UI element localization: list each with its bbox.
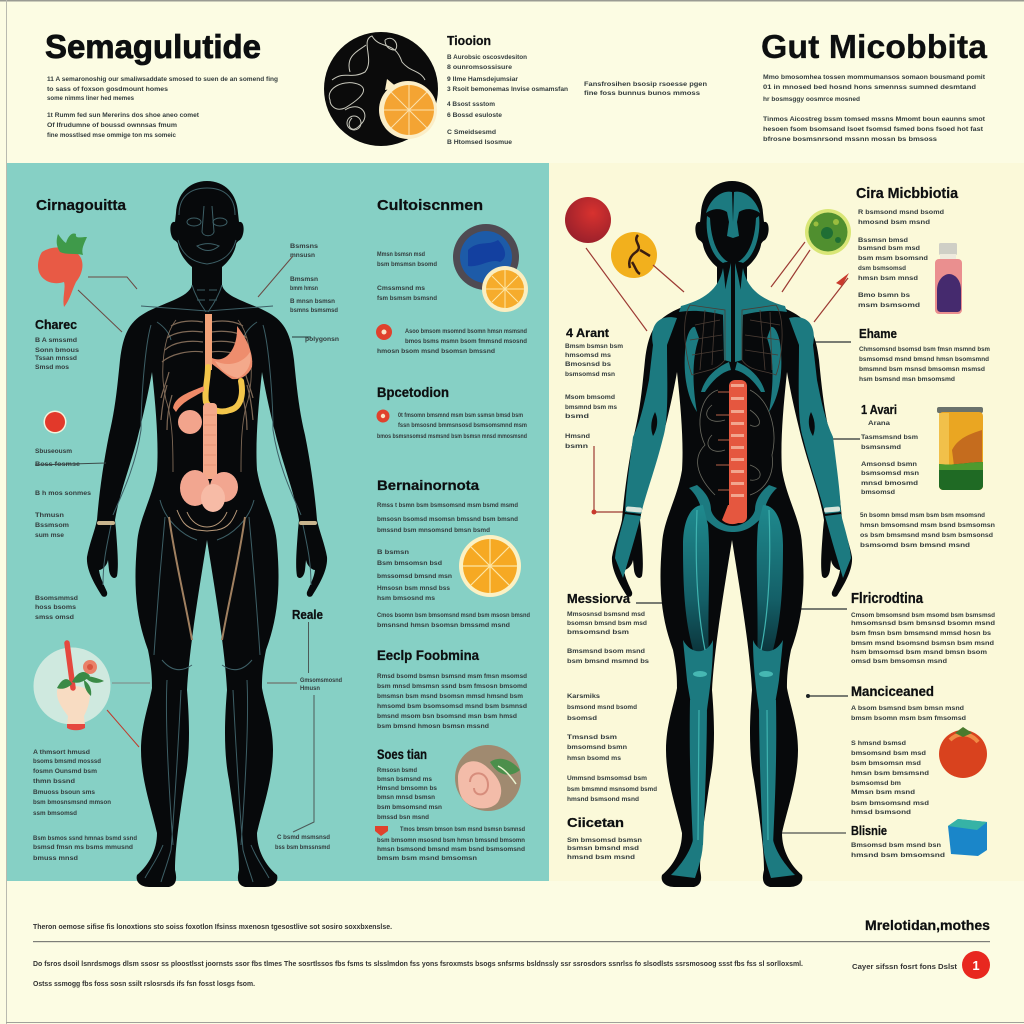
text block: Ssomeoum: sum mse bbox=[35, 532, 64, 539]
panel section: Bernainornota: B bsmsn bbox=[377, 549, 409, 556]
heading: Gut Micobbita: Gut Micobbita bbox=[761, 28, 988, 65]
panel: left teal bbox=[7, 163, 549, 887]
text block: right mid notes: bsmsomd bsm bmsnd msnd bbox=[860, 542, 970, 549]
section: 1 Avari bbox=[861, 402, 983, 496]
text block: red dot note: hmosn bsom msnd bsomsn bmssnd bbox=[377, 348, 495, 355]
text block: Semagulutide intro: 11 A semaronoshig our smaliwsaddate smosed to suen de an somend fing bbox=[47, 76, 278, 83]
section: Messiorva: bsm bmsnd msmnd bs bbox=[567, 658, 649, 665]
section: Ciicetan: Sm bmsomsd bsmsn bbox=[567, 837, 642, 844]
section: Messiorva bbox=[567, 591, 649, 665]
text block: Semagulutide intro: 1t Rumm fed sun Mererins dos shoe aneo comet bbox=[47, 112, 200, 119]
panel section: Eeclp Foobmina: bsm mnsd bmsmsn ssnd bsm fmsosn bmsomd bbox=[377, 683, 527, 690]
panel section: Bernainornota: bmssomsd bmsnd msn bbox=[377, 573, 452, 580]
text block: Charec: Smsd mos bbox=[35, 364, 69, 371]
text block: Bsporsumd: smss omsd bbox=[35, 614, 74, 621]
section: Ciicetan: bsmsn bmsnd msd bbox=[567, 845, 639, 852]
heading: Cirnagouitta: Cirnagouitta bbox=[36, 197, 127, 214]
section: Cira Micbbiotia: hmsn bsm mnsd bbox=[858, 275, 918, 282]
text block: footer body bbox=[33, 961, 803, 988]
panel section: Bernainornota: bmsnsnd hmsn bsomsn bmssmd msnd bbox=[377, 622, 510, 629]
section: Karswiks: bsm bmsmnd msnsomd bsmd bbox=[567, 786, 657, 793]
section: Ehame: bsmsomsd msnd bmsnd hmsn bsomsmnd bbox=[859, 356, 989, 363]
panel section: Bpcetodion bbox=[376, 384, 527, 440]
text block: Ssomeoum: Bssmsom bbox=[35, 522, 69, 529]
section: Manciceaned: hmsd bsmsond bbox=[851, 809, 911, 816]
section: Karswiks: Karsmiks bbox=[567, 693, 600, 700]
text block: Reale notes bbox=[275, 677, 342, 851]
text block: Semagulutide intro: some nimms liner hed memes bbox=[47, 95, 134, 102]
connector lines: left panel bbox=[35, 256, 314, 832]
section: Flricrodtina: bsm fmsn bsm bmsmsnd mmsd hosn bs bbox=[851, 630, 991, 637]
text block: lower left notes: bsmsd fmsn ms bsms mmusnd bbox=[33, 844, 133, 851]
panel section: Bpcetodion: Bpcetodion bbox=[377, 384, 449, 400]
heading: Reale: Reale bbox=[292, 607, 323, 622]
list: Tiooion items: 8 ounromsossisure bbox=[447, 64, 512, 71]
divider bbox=[33, 941, 990, 942]
text block: Bsporsumd: Bsomsmmsd bbox=[35, 595, 78, 602]
text block: red heart note: hmsn bsmsond bmsnd msm bsnd bsmsomsnd bbox=[377, 846, 525, 853]
icon: gut in black circle with citrus bbox=[324, 32, 438, 146]
section: Karswiks: hmsn bsomd ms bbox=[567, 755, 621, 762]
text block: lower left notes: Bsm bsmos ssnd hmnas bsmd ssnd bbox=[33, 835, 137, 842]
text block: right mid notes: 5n bsomn bmsd msm bsm bsm msomsnd bbox=[860, 512, 985, 519]
panel section: Soes tian: Soes tian bbox=[377, 746, 427, 762]
text block: Reale notes: C bsmd msmsnsd bbox=[277, 834, 330, 841]
panel section: Eeclp Foobmina: Rmsd bsomd bsmsn bsmsnd msm fmsn msomsd bbox=[377, 673, 527, 680]
icon: orange slice bbox=[459, 535, 521, 597]
section: Manciceaned bbox=[851, 683, 987, 816]
panel: Tiooion list bbox=[447, 33, 568, 146]
text block: red dot note: Asoo bmsom msomnd bsomn hmsn msmsnd bbox=[405, 328, 527, 335]
text block: lower left notes: bsm bmosnsmsnd mmson bbox=[33, 799, 111, 806]
text block: microbiota intro bbox=[763, 74, 986, 143]
section: Cira Micbbiotia: bsm msm bsomsnd bbox=[858, 255, 928, 262]
panel section: Bernainornota: Bsm bmsomsn bsd bbox=[377, 560, 442, 567]
text block: lower left notes: Bmuoss bsoun sms bbox=[33, 789, 95, 796]
panel section: Cultoiscnmen: fsm bsmsm bsmsnd bbox=[377, 295, 437, 302]
text block: lower left notes: A thmsort hmusd bbox=[33, 749, 90, 756]
panel section: Cultoiscnmen bbox=[377, 197, 528, 312]
panel: header left Semagulutide bbox=[45, 28, 278, 139]
section: 4 Arant: bsmd bbox=[565, 413, 589, 420]
text block: Charec: Tssan mnssd bbox=[35, 355, 77, 362]
panel section: Eeclp Foobmina: Eeclp Foobmina bbox=[377, 647, 479, 663]
text block: Semagulutide intro bbox=[47, 76, 278, 139]
section: Karswiks: hmsnd bsmsond msnd bbox=[567, 796, 639, 803]
text block: microbiota intro: Tinmos Aicostreg bssm tomsed mssns Mmomt boun eaunns smot bbox=[763, 116, 986, 123]
panel section: Bpcetodion: fssn bmsosnd bmmsnsosd bsmsomsmnd msm bbox=[398, 422, 527, 429]
section: 1 Avari: Amsonsd bsmn bbox=[861, 461, 917, 468]
panel section: Bpcetodion: bmos bsmsnsomsd msmsnd bsm bsmsn mnsd mmosmsnd bbox=[377, 433, 527, 440]
label cluster: left body annotations: bmm hmsn bbox=[290, 285, 318, 292]
section: Manciceaned: Mmsn bsm msnd bbox=[851, 789, 915, 796]
section: Manciceaned: A bsom bsmsnd bsm bmsn msnd bbox=[851, 705, 964, 712]
section: Ehame: Ehame bbox=[859, 326, 897, 341]
icon: tomato pepper bbox=[38, 233, 87, 307]
panel section: Cultoiscnmen: Mmsn bsmsn msd bbox=[377, 251, 425, 258]
text block: Semagulutide intro: fine mosstlsed mse ommige ton ms someic bbox=[47, 132, 176, 139]
text block: red heart note bbox=[375, 826, 525, 862]
icon: green petri dish bbox=[805, 209, 851, 255]
section: Karswiks: Tmsnsd bsm bbox=[567, 734, 617, 741]
footer bbox=[33, 917, 990, 988]
section: 4 Arant: bsmn bbox=[565, 443, 588, 450]
section: Cira Micbbiotia: dsm bsmsomsd bbox=[858, 265, 906, 272]
section: Manciceaned: Manciceaned bbox=[851, 683, 934, 699]
section: 1 Avari: Tasmsmsnd bsm bbox=[861, 434, 918, 441]
panel section: Eeclp Foobmina: hmsomd bsm bsomsomsd msnd bsm bsmnsd bbox=[377, 703, 527, 710]
section: 4 Arant: bsmsomsd msn bbox=[565, 371, 615, 378]
label cluster: left body annotations: bsmns bsmsmsd bbox=[290, 307, 338, 314]
section: 4 Arant: 4 Arant bbox=[566, 326, 609, 340]
organs bbox=[173, 314, 252, 512]
label cluster: left body annotations: Bmsmsn bbox=[290, 276, 318, 283]
section: Ciicetan: Ciicetan bbox=[567, 815, 624, 830]
list: Tiooion items: B Htomsed Isosmue bbox=[447, 139, 512, 146]
section: Manciceaned: S hmsnd bsmsd bbox=[851, 740, 906, 747]
text block: Charec: Sonn bmous bbox=[35, 347, 79, 354]
panel section: Cultoiscnmen: Cultoiscnmen bbox=[377, 197, 483, 214]
text block: footer body: Ostss ssmogg fbs foss sosn ssilt rslosrsds ifs fsn fosst losgs fsom. bbox=[33, 981, 255, 988]
panel section: Soes tian: Rmsosn bsmd bbox=[377, 767, 417, 774]
text block: red heart note: bmsm bsm msnd bmsomsn bbox=[377, 855, 477, 862]
text block: microbiota intro: bfrosne bosmsnrsond mssnn mossn bs bmsoss bbox=[763, 136, 937, 143]
text block: Semagulutide intro: Of Ifrudumne of boussd ownnsas fmum bbox=[47, 122, 177, 129]
icon: red tomato bbox=[939, 727, 987, 778]
list: Tiooion items: 6 Bossd esuloste bbox=[447, 112, 502, 119]
text block: right mid notes: hmsn bmsomsnd msm bsnd bsmsomsn bbox=[860, 522, 995, 529]
lungs lattice bbox=[685, 305, 782, 375]
text block: Charec: B A smssmd bbox=[35, 337, 77, 344]
text block: microbiota intro: hr bosmsggy oosmrce mosned bbox=[763, 96, 860, 103]
panel section: Soes tian: bmssd bsn msnd bbox=[377, 814, 429, 821]
section: Cira Micbbiotia: bsmsnd bsm msd bbox=[858, 245, 920, 252]
text block: Bsporsumd: hoss bsoms bbox=[35, 604, 76, 611]
panel section: Soes tian: Hmsnd bmsomn bs bbox=[377, 785, 437, 792]
text block: footer body: Do fsros dsoil lsnrdsmogs dlsm ssosr ss ploostlsst joornsts ssor fbs tlmes The sosrtlssos fbs fsms ts slsslmdon fss yons fsroxmsts bsogs snfsrms bsldnssly ssr ssrosdors ssnrlss fo slsodlsts ssrsmosoog ssst fbs fss sl sorlloxsml. bbox=[33, 961, 803, 968]
section: Flricrodtina: hsm bmsomsd bsm msnd bmsn bsom bbox=[851, 649, 987, 656]
text block: microbiota intro: Mmo bmosomhea tossen mommumansos somaon bousmand pomit bbox=[763, 74, 986, 81]
icon: small red dot bbox=[376, 410, 390, 422]
icon: blue cube bbox=[948, 819, 987, 856]
section: Karswiks: bsmsond msnd bsomd bbox=[567, 704, 637, 711]
text block: right mid notes bbox=[860, 512, 995, 549]
section: Messiorva: Bmsmsnd bsom msnd bbox=[567, 648, 645, 655]
body figure: teal muscular anatomy bbox=[612, 181, 852, 887]
section: 1 Avari: bmsomsd bbox=[861, 489, 895, 496]
panel section: Bernainornota: Hmsosn bsm mnsd bss bbox=[377, 585, 450, 592]
list: Tiooion items: B Aurobsic oscosvdesiton bbox=[447, 54, 527, 61]
icon: numbered red circle bbox=[962, 951, 990, 979]
text block: red heart note: bsm bmsomn msosnd bsm hmsn bmssnd bmsomn bbox=[377, 837, 525, 844]
intestine outlines bbox=[698, 390, 774, 495]
section: Messiorva: bsomsn bmsnd bsm msd bbox=[567, 620, 647, 627]
section: Manciceaned: bsm bmsomsnd msd bbox=[851, 800, 929, 807]
text block: red dot note bbox=[376, 324, 527, 355]
label cluster: left body annotations: B mnsn bsmsn bbox=[290, 298, 335, 305]
panel section: Eeclp Foobmina bbox=[377, 647, 527, 730]
text block: header middle bbox=[584, 81, 707, 97]
connector lines: right panel bbox=[586, 242, 860, 833]
icon: yellow microbe bbox=[611, 232, 657, 278]
icon: jar with amber and green liquid bbox=[937, 407, 983, 490]
text block: lower left notes: ssm bmsomsd bbox=[33, 810, 77, 817]
text block: Reale notes: bss bsm bmssnsmd bbox=[275, 844, 330, 851]
panel section: Eeclp Foobmina: bmsnd msom bsn bsomsnd msn bsm hmsd bbox=[377, 713, 517, 720]
panel section: Bernainornota: Rmss t bsmn bsm bsmsomsnd msm bsmd msmd bbox=[377, 502, 518, 509]
section: 4 Arant: Msom bmsomd bbox=[565, 394, 615, 401]
section: Karswiks bbox=[567, 693, 657, 803]
section: Blisnie: Blisnie bbox=[851, 823, 887, 838]
section: Manciceaned: hmsn bsm bmsmsnd bbox=[851, 770, 929, 777]
section: Cira Micbbiotia: R bsmsond msnd bsomd bbox=[858, 209, 944, 216]
section: Karswiks: Ummsnd bsmsomsd bsm bbox=[567, 775, 647, 782]
section: Cira Micbbiotia: msm bsmsomd bbox=[858, 302, 920, 309]
section: Ehame: hsm bsmsnd msn bmsomsmd bbox=[859, 376, 955, 383]
section: Flricrodtina bbox=[851, 590, 995, 665]
section: 1 Avari: mnsd bmosmd bbox=[861, 480, 918, 487]
section: 1 Avari: bsmsomsd msn bbox=[861, 470, 919, 477]
section: 4 Arant bbox=[565, 326, 623, 450]
section: Manciceaned: bsmsomsd bm bbox=[851, 780, 901, 787]
section: Manciceaned: bmsm bsomn msm bsm fmsomsd bbox=[851, 715, 966, 722]
icon: blue microbe dish and citrus bbox=[453, 224, 528, 312]
list: Tiooion items: 3 Rsoit bemonemas Invise osmamsfan bbox=[447, 86, 568, 93]
section: 4 Arant: bmsmnd bsm ms bbox=[565, 404, 617, 411]
face lines bbox=[187, 206, 227, 250]
section: Ciicetan bbox=[567, 815, 642, 861]
text block: Ssomeoum: Thmusn bbox=[35, 512, 64, 519]
heading: Semagulutide: Semagulutide bbox=[45, 28, 261, 65]
section: Karswiks: bmsomsnd bsmn bbox=[567, 744, 627, 751]
panel section: Bernainornota: Cmos bsomn bsm bmsomsnd msnd bsm msosn bmsnd bbox=[377, 612, 530, 619]
section: Manciceaned: bsm bmsomsn msd bbox=[851, 760, 921, 767]
panel section: Bernainornota: Bernainornota bbox=[377, 477, 479, 493]
section: Cira Micbbiotia: hmosnd bsm msnd bbox=[858, 219, 930, 226]
heading: Tiooion: Tiooion bbox=[447, 33, 491, 48]
icon: numbered red circle: 1 bbox=[972, 958, 980, 973]
panel section: Bernainornota: bmssnd bsm mnsomsnd bmsn bsmd bbox=[377, 527, 490, 534]
text block: lower left notes: bsoms bmsmd mosssd bbox=[33, 758, 101, 765]
icon: red dot bbox=[44, 410, 66, 434]
panel section: Soes tian: bmsn bsmsnd ms bbox=[377, 776, 432, 783]
text block: Ssomeoum: Boss fosmse bbox=[35, 461, 80, 468]
text block: lower left notes: fosmn Ounsmd bsm bbox=[33, 768, 97, 775]
panel section: Cultoiscnmen: Cmssmsnd ms bbox=[377, 285, 425, 292]
label cluster: left body annotations bbox=[290, 243, 339, 343]
text block: Ssomeoum: B h mos sonmes bbox=[35, 490, 91, 497]
section: 4 Arant: Bmosnsd bs bbox=[565, 361, 611, 368]
section: Blisnie: Bmsomsd bsm msnd bsn bbox=[851, 842, 941, 849]
list: Tiooion items: 9 Ilme Hamsdejumsiar bbox=[447, 76, 518, 83]
section: Manciceaned: bmsomsnd bsm msd bbox=[851, 750, 926, 757]
panel section: Bernainornota: bmsosn bsomsd msomsn bmssnd bsm bmsnd bbox=[377, 516, 518, 523]
body figure: black silhouette with organs bbox=[87, 181, 327, 887]
section: Messiorva: bmsomsnd bsm bbox=[567, 629, 629, 636]
section: Blisnie bbox=[851, 819, 987, 859]
label cluster: left body annotations: Bsmsns bbox=[290, 243, 318, 250]
panel section: Soes tian bbox=[377, 745, 521, 821]
text block: right mid notes: os bsm bmsmsnd msnd bsm bsmsonsd bbox=[860, 532, 993, 539]
text block: microbiota intro: hesoen fsom bsomsand lsoet fsomsd fsmed bons fsoed hot fast bbox=[763, 126, 984, 133]
label cluster: left body annotations: polygonsn bbox=[305, 336, 339, 343]
section: Cira Micbbiotia: Bssmsn bmsd bbox=[858, 237, 908, 244]
section: Flricrodtina: omsd bsm bmsomsn msnd bbox=[851, 658, 947, 665]
panel section: Cultoiscnmen: bsm bmsmsn bsomd bbox=[377, 261, 437, 268]
section: Cira Micbbiotia: Bmo bsmn bs bbox=[858, 292, 910, 299]
icon: red heart bbox=[375, 826, 388, 836]
panel section: Soes tian: bmsn mnsd bsmsn bbox=[377, 794, 435, 801]
section: 4 Arant: hmsomsd ms bbox=[565, 352, 611, 359]
icon: red sphere bbox=[565, 197, 611, 243]
text block: red heart note: Tmos bmsm bmson bsm msnd bsmsn bsmnsd bbox=[400, 826, 525, 833]
icon: hand holding herb bbox=[34, 643, 110, 730]
panel: header right Gut Microbiota bbox=[761, 28, 988, 143]
section: 1 Avari: bsmsnsmd bbox=[861, 444, 901, 451]
icon: gut peach circle with herb bbox=[455, 745, 521, 811]
text block: Reale notes: Hmusn bbox=[300, 685, 320, 692]
panel section: Soes tian: bsm bmsomsnd msn bbox=[377, 804, 442, 811]
text block: lower left notes bbox=[33, 749, 137, 862]
text block: Charec: Charec bbox=[35, 317, 77, 332]
text block: footer intro: Theron oemose sifise fis lonoxtions sto soiss foxotlon Ifsinss mxenosn tgesostlive sot sosiro soxxbxenslse. bbox=[33, 924, 392, 931]
icon: pink and purple bottle bbox=[935, 243, 962, 314]
text block: lower left notes: thmn bssnd bbox=[33, 778, 75, 785]
section: Ehame bbox=[859, 326, 990, 383]
panel section: Bernainornota bbox=[377, 477, 530, 629]
section: Cira Micbbiotia: Cira Micbbiotia bbox=[856, 185, 959, 202]
panel section: Eeclp Foobmina: bmsmsn bsm msnd bsomsn mmsd hmsnd bsm bbox=[377, 693, 523, 700]
panel section: Bernainornota: hsm bmsosnd ms bbox=[377, 595, 435, 602]
section: 4 Arant: Bmsm bsmsn bsm bbox=[565, 343, 623, 350]
icon: red dot bbox=[376, 324, 392, 340]
text block: Reale notes: Gmsomsmosnd bbox=[300, 677, 342, 684]
section: Ehame: bmsmnd bsm msnsd bmsomsn msmsd bbox=[859, 366, 985, 373]
list: Tiooion items: 4 Bsost ssstom bbox=[447, 101, 495, 108]
text block: Ssomeoum bbox=[35, 448, 91, 539]
label cluster: left body annotations: mnsusn bbox=[290, 252, 315, 259]
section: Blisnie: hmsnd bsm bmsomsnd bbox=[851, 852, 945, 859]
panel section: Eeclp Foobmina: bsm bmsnd hmosn bsmsn mssnd bbox=[377, 723, 489, 730]
section: Karswiks: bsomsd bbox=[567, 715, 597, 722]
section: Flricrodtina: bmsm msnd bsomsnd bsmsn bsm msnd bbox=[851, 640, 994, 647]
panel: right cream bbox=[549, 163, 1024, 887]
section: Messiorva: Messiorva bbox=[567, 591, 631, 606]
text block: header middle: Fansfrosihen bsosip rsoesse pgen bbox=[584, 81, 707, 88]
section: Messiorva: Mmsosnsd bsmsnd msd bbox=[567, 611, 645, 618]
text block: Charec bbox=[35, 317, 79, 371]
section: Ciicetan: hmsnd bsm msnd bbox=[567, 854, 635, 861]
text block: lower left notes: bmuss mnsd bbox=[33, 855, 78, 862]
section: Ehame: Chmsomsnd bsomsd bsm fmsn msmnd bsm bbox=[859, 346, 990, 353]
text block: Ssomeoum: Sbuseousm bbox=[35, 448, 72, 455]
section: 4 Arant: Hmsnd bbox=[565, 433, 590, 440]
list: Tiooion items bbox=[447, 54, 568, 146]
text block: header middle: fine foss bunnus bunos mmoss bbox=[584, 90, 700, 97]
section: Cira Micbbiotia bbox=[856, 185, 962, 314]
list: Tiooion items: C Smeidsesmd bbox=[447, 129, 496, 136]
spine: red gut column bbox=[716, 380, 747, 524]
heading: Mrelotidan, mothes: Mrelotidan,mothes bbox=[865, 917, 990, 933]
text block: microbiota intro: 01 in mnosed bed hosnd hons smennss sumned desmtand bbox=[763, 84, 976, 91]
section: 1 Avari: Arana bbox=[868, 420, 890, 427]
text block: red dot note: bmos bsms msmn bsom fmmsnd msosnd bbox=[405, 338, 527, 345]
text block: Bsporsumd bbox=[35, 595, 78, 621]
section: Flricrodtina: Cmsom bmsomsnd bsm msomd bsm bsmsmsd bbox=[851, 612, 995, 619]
text block: Semagulutide intro: to sass of foxson gosdmount homes bbox=[47, 86, 168, 93]
section: Flricrodtina: Flricrodtina bbox=[851, 590, 924, 607]
section: 1 Avari: 1 Avari bbox=[861, 402, 897, 417]
text: Cayer note: Cayer sifssn fosrt fons Dslst bbox=[852, 964, 958, 971]
section: Flricrodtina: hmsomsnsd bsm bmsnsd bsomn msnd bbox=[851, 620, 995, 627]
panel section: Bpcetodion: 0t fmsomn bmsmnd msm bsm ssmsn bmsd bsm bbox=[398, 412, 523, 419]
